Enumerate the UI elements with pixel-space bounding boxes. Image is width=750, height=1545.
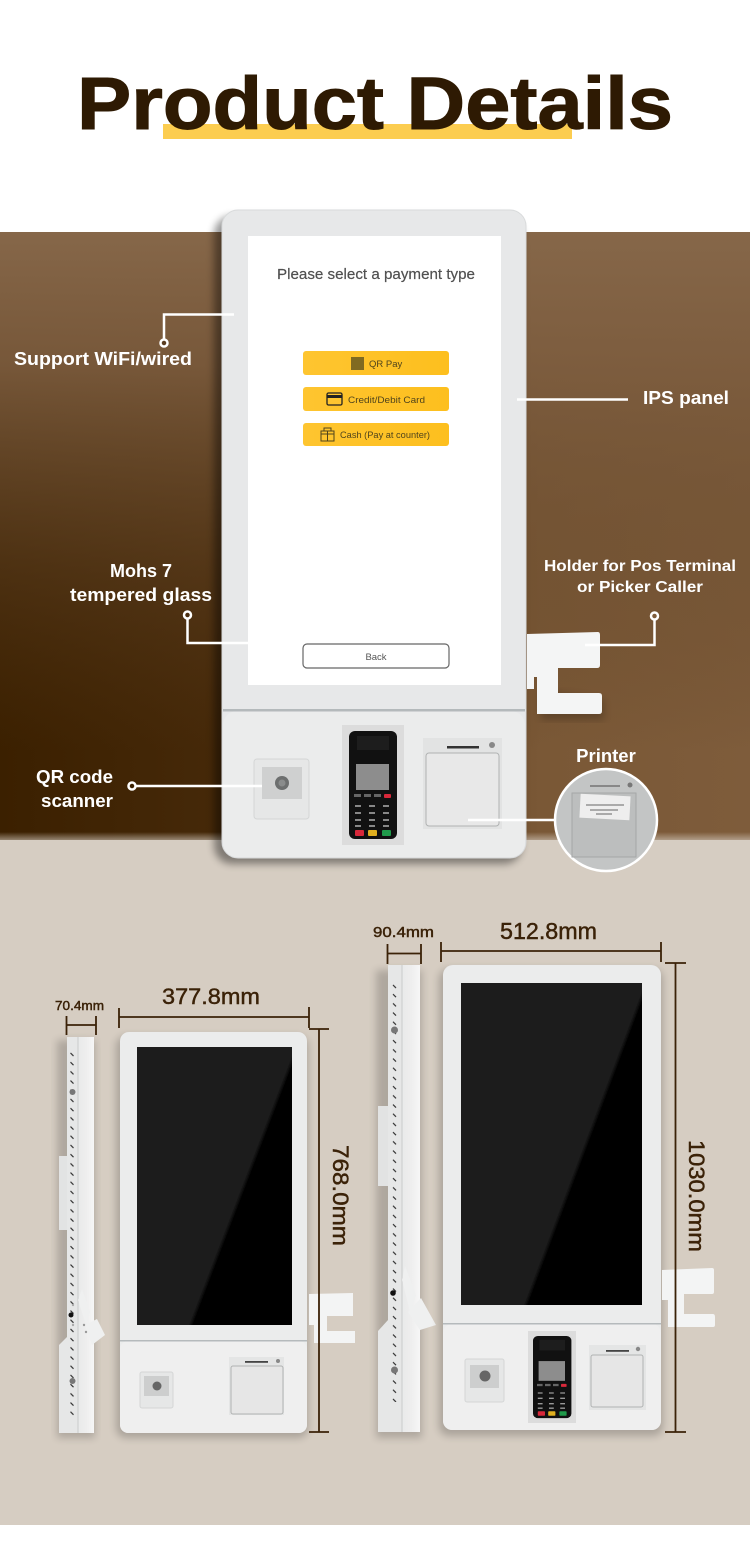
small height dimension: 768.0mm	[328, 1145, 353, 1246]
holder bracket	[527, 632, 604, 720]
large depth dimension: 90.4mm	[373, 924, 434, 941]
small width dimension	[119, 984, 309, 1028]
receipt printer	[423, 738, 502, 829]
QR scanner	[254, 759, 309, 819]
screen	[248, 236, 501, 685]
POS terminal	[342, 725, 404, 845]
large depth dimension	[373, 924, 434, 964]
large POS terminal	[528, 1331, 576, 1423]
small depth dimension: 70.4mm	[55, 998, 104, 1013]
callout: QR code scanner: scanner	[41, 791, 113, 811]
button: QR Pay: QR Pay	[369, 359, 403, 370]
small height dimension	[309, 1029, 353, 1432]
callout: holder for POS terminal: Holder for Pos Terminal	[544, 558, 736, 575]
large width dimension	[441, 918, 661, 962]
callout: IPS panel: IPS panel	[643, 388, 729, 408]
title: Product Details	[77, 62, 673, 145]
large height dimension	[665, 963, 709, 1432]
small depth dimension	[55, 998, 104, 1035]
button: back	[303, 644, 449, 668]
small kiosk side view	[57, 1037, 105, 1438]
small width dimension: 377.8mm	[162, 984, 260, 1009]
large kiosk front view	[439, 965, 715, 1436]
small screen	[137, 1047, 292, 1325]
callout: QR code scanner	[36, 767, 262, 811]
large scanner	[465, 1359, 504, 1402]
callout: Mohs 7 tempered glass: Mohs 7	[110, 561, 172, 581]
small scanner	[140, 1372, 173, 1408]
small kiosk front view	[116, 1032, 355, 1438]
button: cash: Cash (Pay at counter)	[340, 430, 430, 441]
callout: Support WiFi/wired	[14, 314, 234, 369]
small holder	[309, 1293, 355, 1343]
callout: printer	[468, 745, 657, 871]
large width dimension: 512.8mm	[500, 918, 597, 944]
button: credit/debit card	[303, 387, 449, 411]
screen heading: Please select a payment type	[277, 266, 475, 283]
button: credit/debit card: Credit/Debit Card	[348, 395, 425, 406]
button: QR Pay	[303, 351, 449, 375]
callout: QR code scanner: QR code	[36, 767, 113, 787]
large height dimension: 1030.0mm	[684, 1140, 709, 1252]
main kiosk product image	[214, 210, 604, 864]
large kiosk side view	[376, 965, 436, 1438]
callout: holder for POS terminal	[544, 558, 736, 645]
large screen	[461, 983, 642, 1305]
large printer	[589, 1345, 646, 1410]
small printer	[229, 1357, 284, 1415]
button: cash	[303, 423, 449, 446]
callout: holder for POS terminal: or Picker Caller	[577, 579, 703, 596]
button: back: Back	[365, 652, 387, 663]
callout: printer: Printer	[576, 745, 636, 766]
large holder	[662, 1268, 715, 1327]
callout: Mohs 7 tempered glass	[70, 561, 248, 643]
callout: Mohs 7 tempered glass: tempered glass	[70, 585, 212, 605]
callout: Support WiFi/wired: Support WiFi/wired	[14, 349, 192, 369]
